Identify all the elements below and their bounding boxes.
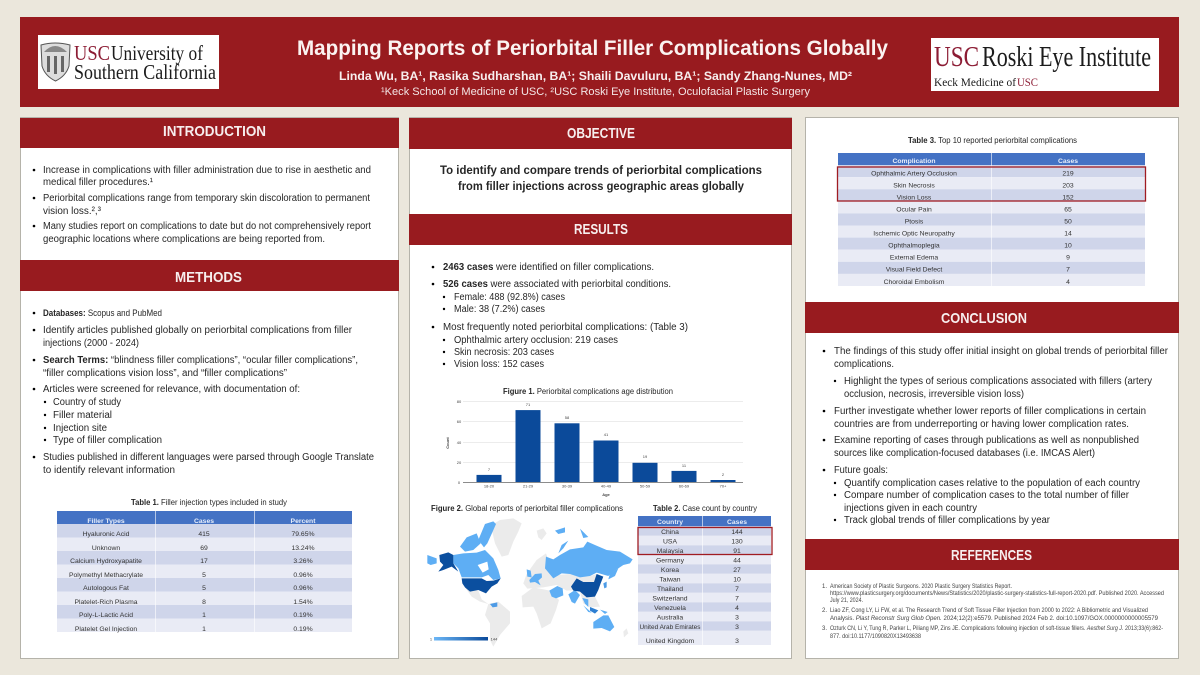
text block: results bullets: 526 cases were associated with periorbital conditions.: [443, 279, 671, 290]
table 3: top 10 complications: Visual Field Defect: [886, 266, 942, 274]
table 3: top 10 complications: 50: [1064, 218, 1072, 226]
table 2: case count by country: 7: [735, 586, 739, 593]
figure 1: age distribution bar chart: 40-49: [601, 484, 612, 488]
text block: references: 3.: [822, 626, 827, 632]
logo: USC University of Southern California: Southern California: [74, 60, 217, 84]
text block: methods bullets: Country of study: [53, 397, 121, 408]
logo: USC Roski Eye Institute: Roski Eye Institute: [982, 42, 1151, 73]
text block: methods bullets: injections (2000 - 2024): [43, 338, 139, 349]
text block: references: https://www.plasticsurgery.org/documents/News/Statistics/2020/plastic-surgery-statistics-full-report-2020.pdf. Published 2020. Accessed: [830, 591, 1164, 597]
table 2: case count by country: Malaysia: [657, 548, 684, 555]
table 3: top 10 complications: Ophthalmoplegia: [888, 242, 940, 250]
table 2: case count by country: 7: [735, 596, 739, 602]
panel: objective and results: [409, 118, 792, 658]
table 1: filler injection types: 0.96%: [293, 585, 313, 592]
figure 2: world map of reports: [427, 504, 633, 647]
text block: introduction bullets: Periorbital complications range from temporary skin discoloration to permanent: [43, 193, 370, 204]
table 1: filler injection types: 8: [202, 599, 206, 606]
text block: results bullets: [432, 262, 688, 370]
text block: methods bullets: Identify articles published globally on periorbital complications from filler: [43, 325, 353, 336]
figure 1: age distribution bar chart: 71: [526, 402, 531, 407]
text block: results bullets: Ophthalmic artery occlusion: 219 cases: [454, 335, 618, 346]
logo: USC University of Southern California: [38, 35, 219, 89]
table 3: top 10 complications: Ophthalmic Artery Occlusion: [871, 170, 957, 178]
text block: methods bullets: Articles were screened for relevance, with documentation of:: [43, 384, 300, 395]
figure 1: age distribution bar chart: Count: [445, 437, 450, 449]
text block: methods bullets: [33, 308, 374, 476]
table 2: case count by country: 3: [735, 614, 739, 622]
text block: conclusion bullets: sources like complication-focused databases (i.e. IMCAS Alert): [834, 448, 1095, 459]
heading: conclusion: [805, 302, 1179, 333]
text block: results bullets: 2463 cases were identified on filler complications.: [443, 262, 654, 273]
map legend: 1: [430, 636, 433, 642]
table 2: case count by country: Switzerland: [652, 596, 688, 602]
affiliations: ¹Keck School of Medicine of USC, ²USC Roski Eye Institute, Oculofacial Plastic Surgery: [381, 86, 810, 98]
table 2: case count by country: 4: [735, 605, 739, 612]
text block: introduction bullets: Increase in complications with filler administration due to rise in aesthetic and: [43, 165, 371, 176]
table 3: top 10 complications: Ptosis: [905, 218, 924, 226]
figure 1: age distribution bar chart: 41: [604, 432, 609, 437]
table 3: top 10 complications: [838, 136, 1146, 286]
callout: top three complications: [838, 167, 1146, 201]
text block: methods bullets: Type of filler complication: [53, 435, 162, 446]
text block: references: 2.: [822, 608, 827, 614]
heading: methods: METHODS: [175, 269, 242, 286]
text block: conclusion bullets: Highlight the types of serious complications associated with fillers (artery: [844, 376, 1152, 387]
figure 1: age distribution bar chart: 7: [488, 467, 491, 472]
table 2: case count by country: 130: [731, 538, 743, 546]
map legend: 144: [491, 636, 498, 642]
text block: methods bullets: Filler material: [53, 410, 112, 421]
table 3: top 10 complications: Ischemic Optic Neuropathy: [873, 230, 955, 238]
table 3: top 10 complications: External Edema: [890, 254, 938, 262]
text block: methods bullets: “filler complications vision loss”, and “filler complications”: [43, 368, 287, 379]
text block: results bullets: Most frequently noted periorbital complications: (Table 3): [443, 322, 688, 333]
table 3: top 10 complications: Table 3. Top 10 reported periorbital complications: [908, 136, 1077, 145]
table 3: top 10 complications: Complication: [892, 158, 936, 165]
table 3: top 10 complications: Choroidal Embolism: [884, 279, 945, 286]
table 1: filler injection types: 0.19%: [293, 626, 313, 633]
table 2: case count by country: Taiwan: [659, 576, 681, 584]
table 2: case count by country: Venezuela: [654, 605, 686, 612]
heading: references: REFERENCES: [951, 547, 1032, 564]
table 1: filler injection types: Table 1. Filler injection types included in study: [131, 498, 287, 507]
text block: introduction bullets: geographic locations where complications are being reported from.: [43, 234, 325, 245]
text block: introduction bullets: vision loss.²,³: [43, 206, 102, 217]
table 1: filler injection types: 5: [202, 572, 206, 579]
heading: objective: [409, 118, 792, 149]
table 3: top 10 complications: 65: [1064, 206, 1072, 214]
figure 1: age distribution bar chart: 19: [643, 454, 648, 459]
text block: conclusion bullets: Track global trends of filler complications by year: [844, 515, 1051, 526]
heading: introduction: INTRODUCTION: [163, 123, 266, 140]
text block: conclusion bullets: occlusion, necrosis, irreversible vision loss): [844, 389, 1024, 400]
text block: methods bullets: Search Terms: “blindness filler complications”, “ocular filler complications”,: [43, 355, 358, 366]
figure 2: world map of reports: Figure 2. Global reports of periorbital filler complications: [431, 504, 623, 513]
table 3: top 10 complications: 203: [1062, 182, 1074, 190]
header banner: [20, 17, 1179, 107]
figure 1: age distribution bar chart: Age: [602, 492, 611, 497]
table 3: top 10 complications: Ocular Pain: [896, 206, 932, 214]
text block: results bullets: Skin necrosis: 203 cases: [454, 347, 554, 358]
authors: Linda Wu, BA¹, Rasika Sudharshan, BA¹; Shaili Davuluru, BA¹; Sandy Zhang-Nunes, MD²: [339, 69, 852, 83]
table 1: filler injection types: Platelet Gel Injection: [75, 626, 137, 633]
table 1: filler injection types: Poly-L-Lactic Acid: [79, 612, 133, 619]
logo: USC Roski Eye Institute: [931, 38, 1159, 91]
text block: conclusion bullets: Future goals:: [834, 465, 888, 476]
table 2: case count by country: USA: [663, 538, 677, 546]
heading: objective: OBJECTIVE: [567, 125, 635, 142]
table 2: case count by country: Germany: [656, 558, 685, 564]
logo: USC University of Southern California: USC: [74, 41, 110, 65]
table 1: filler injection types: Unknown: [92, 545, 120, 552]
logo: USC Roski Eye Institute: Keck Medicine of: [934, 77, 1016, 89]
figure 1: age distribution bar chart: 21-29: [523, 484, 534, 488]
table 1: filler injection types: Autologous Fat: [83, 585, 129, 592]
table 2: case count by country: 144: [731, 529, 743, 536]
table 3: top 10 complications: 7: [1066, 266, 1070, 274]
text block: methods bullets: Injection site: [53, 423, 107, 434]
text block: conclusion bullets: countries are from underreporting or having lower complication rates.: [834, 419, 1129, 430]
text block: results bullets: Male: 38 (7.2%) cases: [454, 304, 545, 315]
table 2: case count by country: 91: [733, 548, 741, 555]
text block: references: July 21, 2024.: [830, 598, 863, 604]
figure 1: age distribution bar chart: Figure 1. Periorbital complications age distribution: [503, 387, 673, 396]
table 2: case count by country: Australia: [657, 614, 683, 622]
table 2: case count by country: Country: [657, 519, 683, 526]
text block: references: 877. doi:10.1177/1090820X13493638: [830, 634, 922, 640]
table 1: filler injection types: Cases: [194, 518, 214, 525]
figure 1: age distribution bar chart: 11: [682, 463, 687, 468]
table 3: top 10 complications: 9: [1066, 254, 1070, 262]
figure 1: age distribution bar chart: 70+: [720, 484, 727, 488]
table 2: case count by country: Thailand: [657, 586, 683, 593]
table 1: filler injection types: Polymethyl Methacrylate: [69, 572, 143, 579]
text block: conclusion bullets: The findings of this study offer initial insight on global trends of periorbital filler: [834, 346, 1169, 357]
table 1: filler injection types: 79.65%: [291, 531, 315, 538]
heading: results: [409, 214, 792, 245]
panel: introduction and methods: [20, 118, 399, 658]
text block: introduction bullets: medical filler procedures.¹: [43, 177, 154, 188]
heading: introduction: [20, 118, 399, 148]
table 3: top 10 complications: 10: [1064, 242, 1072, 250]
table 1: filler injection types: 5: [202, 585, 206, 592]
table 1: filler injection types: 3.26%: [293, 558, 313, 565]
text block: methods bullets: Databases: Scopus and PubMed: [43, 308, 162, 319]
table 2: case count by country: Korea: [661, 567, 679, 574]
table 2: case count by country: United Arab Emirates: [640, 624, 701, 631]
figure 1: age distribution bar chart: 20: [457, 460, 462, 465]
table 3: top 10 complications: Vision Loss: [897, 194, 932, 202]
table 1: filler injection types: 415: [198, 531, 210, 538]
heading: methods: [20, 260, 399, 291]
logo: USC University of Southern California: University of: [111, 41, 203, 65]
title: Mapping Reports of Periorbital Filler Complications Globally: [297, 37, 888, 60]
table 1: filler injection types: Filler Types: [87, 518, 125, 525]
table 2: case count by country: 10: [733, 576, 741, 584]
figure 1: age distribution bar chart: 50-59: [640, 484, 651, 488]
text block: introduction bullets: [33, 165, 371, 245]
text block: conclusion bullets: complications.: [834, 359, 894, 370]
table 1: filler injection types: 17: [200, 558, 208, 565]
text block: results bullets: Vision loss: 152 cases: [454, 359, 544, 370]
table 2: case count by country: 3: [735, 624, 739, 631]
figure 1: age distribution bar chart: 60: [457, 419, 462, 424]
text block: references: 1.: [822, 584, 827, 590]
table 3: top 10 complications: Skin Necrosis: [893, 182, 935, 190]
table 1: filler injection types: 0.19%: [293, 612, 313, 619]
text block: conclusion bullets: injections given in each country: [844, 503, 977, 514]
figure 1: age distribution bar chart: 60-69: [679, 484, 690, 488]
table 2: case count by country: [638, 504, 772, 645]
figure 1: age distribution bar chart: [445, 387, 743, 497]
table 2: case count by country: Cases: [727, 519, 747, 526]
table 2: case count by country: United Kingdom: [646, 638, 695, 645]
text block: conclusion bullets: [823, 346, 1169, 526]
table 3: top 10 complications: 152: [1062, 194, 1074, 202]
figure 1: age distribution bar chart: 0: [458, 480, 461, 485]
table 3: top 10 complications: 14: [1064, 230, 1072, 238]
figure 1: age distribution bar chart: 18-20: [484, 484, 495, 488]
table 2: case count by country: Table 2. Case count by country: [653, 504, 757, 513]
figure 1: age distribution bar chart: 30-39: [562, 484, 573, 488]
objective statement: from filler injections across geographic areas globally: [458, 179, 744, 193]
figure 1: age distribution bar chart: 80: [457, 399, 462, 404]
panel: table 3, conclusion and references: [805, 118, 1179, 658]
text block: references: American Society of Plastic Surgeons. 2020 Plastic Surgery Statistics Report.: [830, 584, 1012, 590]
text block: methods bullets: Studies published in different languages were parsed through Google Translate: [43, 452, 374, 463]
table 1: filler injection types: 1: [202, 626, 206, 633]
table 1: filler injection types: Hyaluronic Acid: [83, 531, 130, 538]
objective statement: To identify and compare trends of periorbital complications: [440, 163, 762, 177]
table 3: top 10 complications: Cases: [1058, 158, 1078, 165]
table 1: filler injection types: 69: [200, 545, 208, 552]
table 3: top 10 complications: 219: [1062, 170, 1074, 178]
text block: references: Analysis. Plast Reconstr Surg Glob Open. 2024;12(2):e5579. Published 2024 Feb 2. doi:10.1097/GOX.0000000000005579: [830, 616, 1159, 622]
table 1: filler injection types: Percent: [291, 518, 316, 525]
text block: introduction bullets: Many studies report on complications to date but do not comprehensively report: [43, 221, 371, 232]
map legend: [430, 636, 498, 642]
heading: conclusion: CONCLUSION: [941, 310, 1027, 327]
logo: USC Roski Eye Institute: USC: [934, 42, 979, 73]
callout: top three countries: [638, 528, 772, 554]
figure 1: age distribution bar chart: 58: [565, 415, 570, 420]
table 1: filler injection types: 1.54%: [293, 599, 313, 606]
table 1: filler injection types: Platelet-Rich Plasma: [74, 599, 138, 606]
figure 1: age distribution bar chart: 40: [457, 440, 462, 445]
text block: conclusion bullets: Compare number of complication cases to the total number of filler: [844, 490, 1130, 501]
table 1: filler injection types: [57, 498, 352, 633]
table 1: filler injection types: 13.24%: [291, 545, 315, 552]
table 1: filler injection types: Calcium Hydroxyapatite: [70, 558, 142, 565]
table 1: filler injection types: 1: [202, 612, 206, 619]
text block: references: [822, 584, 1164, 640]
text block: results bullets: Female: 488 (92.8%) cases: [454, 292, 565, 303]
table 2: case count by country: 44: [733, 558, 741, 564]
table 1: filler injection types: 0.96%: [293, 572, 313, 579]
text block: methods bullets: to identify relevant information: [43, 465, 175, 476]
table 3: top 10 complications: 4: [1066, 279, 1070, 286]
text block: references: Liao ZF, Cong LY, Li FW, et al. The Research Trend of Soft Tissue Filler Injection from 2000 to 2022: A Bibliometric and Visualized: [830, 608, 1148, 614]
table 2: case count by country: 3: [735, 638, 739, 645]
table 2: case count by country: 27: [733, 567, 741, 574]
text block: conclusion bullets: Quantify complication cases relative to the population of each country: [844, 478, 1140, 489]
heading: references: [805, 539, 1179, 570]
text block: conclusion bullets: Further investigate whether lower reports of filler complications in certain: [834, 406, 1146, 417]
text block: conclusion bullets: Examine reporting of cases through publications as well as nonpublished: [834, 435, 1139, 446]
table 2: case count by country: China: [661, 529, 679, 536]
text block: references: Ozturk CN, Li Y, Tung R, Parker L, Piliang MP, Zins JE. Complications following injection of soft-tissue fillers. Aesthet Surg J. 2013;33(6):862-: [830, 626, 1163, 632]
heading: results: RESULTS: [574, 221, 628, 238]
logo: USC Roski Eye Institute: USC: [1017, 77, 1038, 89]
objective statement: [440, 163, 762, 193]
figure 1: age distribution bar chart: 2: [722, 472, 725, 477]
